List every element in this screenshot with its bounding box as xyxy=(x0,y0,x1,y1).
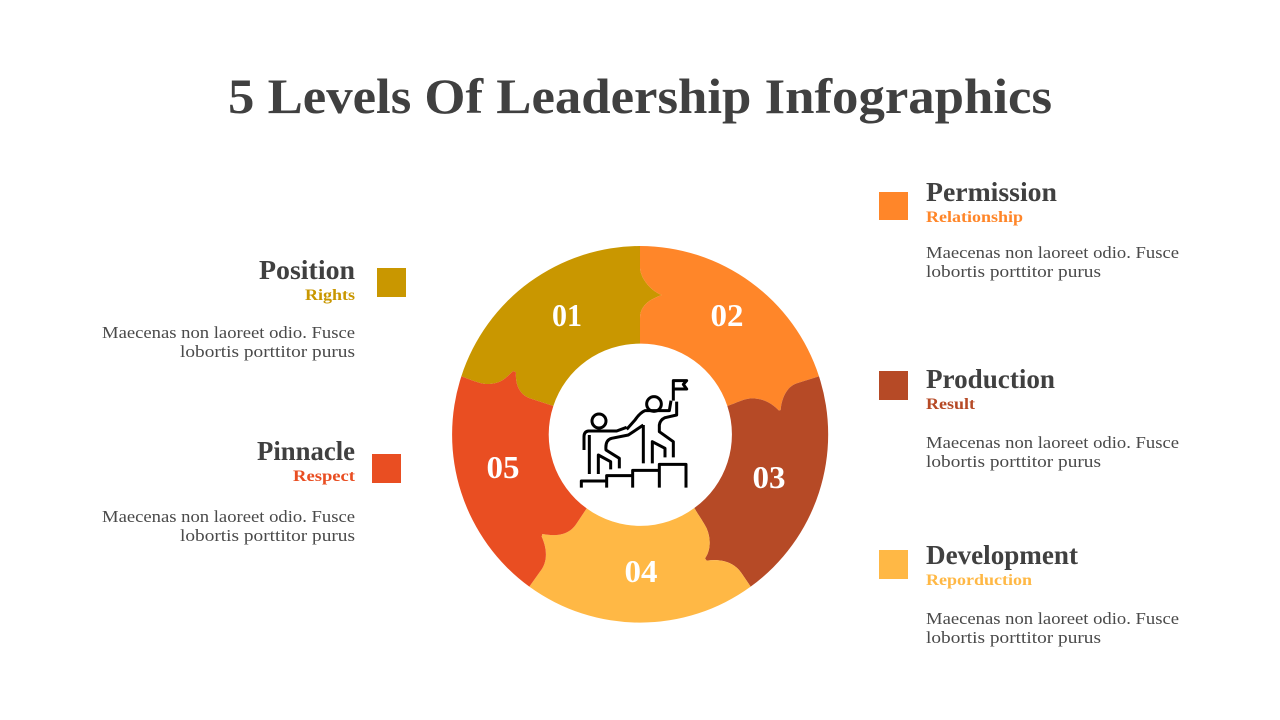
number 03: 03 xyxy=(752,459,786,495)
segment 02 xyxy=(640,246,819,411)
heading: permission: Permission xyxy=(926,177,1057,207)
segment 04 xyxy=(529,508,751,623)
body text: production: Maecenas non laoreet odio. Fusce xyxy=(926,433,1179,452)
swatch: permission xyxy=(879,192,908,220)
body text: pinnacle: Maecenas non laoreet odio. Fusce xyxy=(102,507,355,526)
body text: permission: lobortis porttitor purus xyxy=(926,262,1101,281)
body text: position xyxy=(102,323,355,361)
swatch: production xyxy=(879,371,908,400)
number 02: 02 xyxy=(710,297,744,333)
panel: development xyxy=(879,540,1179,647)
heading: production: Production xyxy=(926,364,1055,394)
body text: development: lobortis porttitor purus xyxy=(926,628,1101,647)
body text: production: lobortis porttitor purus xyxy=(926,452,1101,471)
heading: development: Development xyxy=(926,540,1078,570)
number 01: 01 xyxy=(552,297,582,333)
body text: position: lobortis porttitor purus xyxy=(180,342,355,361)
body text: position: Maecenas non laoreet odio. Fusce xyxy=(102,323,355,342)
swatch: position xyxy=(377,268,406,297)
segment 01 xyxy=(461,246,662,406)
body text: pinnacle: lobortis porttitor purus xyxy=(180,526,355,545)
number 05: 05 xyxy=(486,449,520,485)
segment 03 xyxy=(694,376,828,587)
body text: permission xyxy=(926,243,1179,281)
panel: production xyxy=(879,364,1179,471)
body text: pinnacle xyxy=(102,507,355,545)
swatch: pinnacle xyxy=(372,454,401,483)
body text: production xyxy=(926,433,1179,471)
number 04: 04 xyxy=(624,553,658,589)
icon: leaders climbing steps xyxy=(581,381,687,488)
subheading: respect: Respect xyxy=(293,468,356,485)
subheading: reporduction: Reporduction xyxy=(926,572,1032,589)
heading: pinnacle: Pinnacle xyxy=(257,436,355,466)
subheading: rights: Rights xyxy=(305,287,355,304)
subheading: result: Result xyxy=(926,396,976,413)
segment 05 xyxy=(452,371,587,587)
body text: development xyxy=(926,609,1179,647)
body text: development: Maecenas non laoreet odio. Fusce xyxy=(926,609,1179,628)
body text: permission: Maecenas non laoreet odio. Fusce xyxy=(926,243,1179,262)
panel: pinnacle xyxy=(102,436,401,545)
panel: permission xyxy=(879,177,1179,281)
heading: position: Position xyxy=(259,255,355,285)
swatch: development xyxy=(879,550,908,579)
title: 5 Levels Of Leadership Infographics xyxy=(228,68,1052,124)
subheading: relationship: Relationship xyxy=(926,209,1023,226)
panel: position xyxy=(102,255,406,361)
ring diagram xyxy=(452,246,828,623)
